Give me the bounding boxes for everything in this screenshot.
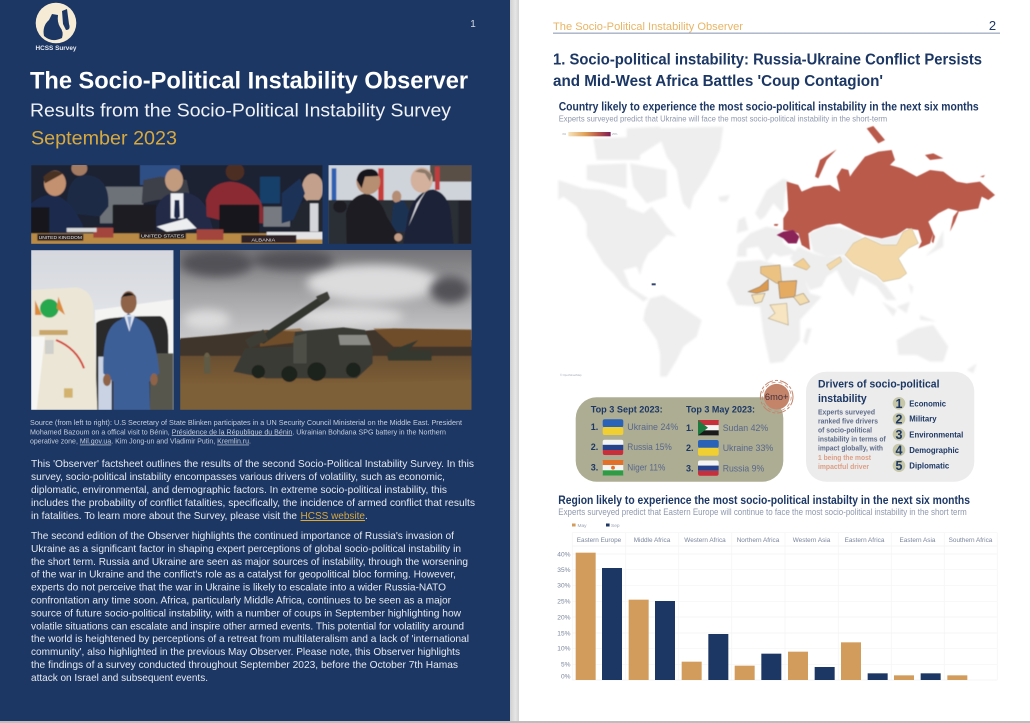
bar chart heading: Region likely to experience the most socio-political instabilty in the next six months [558,495,970,507]
text block: survey introduction: includes the probability of conflict fatalities, specifically, the incidence of armed conflict that results [31,498,475,509]
y axis labels: 25% [557,599,571,606]
May bars [576,553,967,680]
flag: Russia [698,460,719,476]
country: China [845,228,918,282]
flag: Niger [603,460,623,476]
country: Afghanistan [827,257,842,270]
country: Syria [793,258,810,270]
photo: UN Security Council: UNITED STATES [141,233,185,239]
running header [553,18,1000,34]
y axis labels: 40% [557,552,571,558]
panel: top 3 countries: 3. [591,462,598,472]
September bars [602,568,941,680]
flag: Ukraine [698,440,719,456]
text block: survey introduction [31,459,475,522]
text block: survey findings: volatile situations can escalate and inspire other armed events. This potential for volatility around [31,622,464,632]
text block: survey findings: the short term. Russia and Ukraine are seen as major sources of instability, through the worsening [31,557,468,568]
y axis labels: 0% [561,673,571,680]
driver 1: Economic: Economic [909,400,947,408]
subtitle: Results from the Socio-Political Instability Survey [30,100,452,120]
running header: The Socio-Political Instability Observer [553,21,743,33]
list: May results [723,423,774,474]
region labels: Eastern Africa [845,537,885,544]
drivers description [818,408,886,471]
logo: HCSS Survey [36,3,77,52]
page bottom edge [0,721,1030,723]
country: Nigeria [752,293,765,303]
region labels [577,537,993,544]
drivers heading: Drivers of socio-political [818,378,940,390]
chart legend [572,523,620,529]
driver 2: Military [893,412,937,426]
region labels: Western Asia [793,537,831,544]
badge: 6mo+: 6mo+ [765,392,788,402]
text block: survey findings: confrontation any time soon. Africa, particularly Middle Africa, continues to be seen as a major [31,596,452,606]
section heading: and Mid-West Africa Battles 'Coup Contagion' [553,73,883,90]
drivers description: Experts surveyed [818,408,875,416]
chart legend: May [578,523,587,529]
country: Ethiopia [793,293,809,305]
photo: Kim Jong-un and Vladimir Putin [328,165,472,244]
driver 5: Diplomatic: 5 [896,459,903,473]
map legend [562,132,618,136]
panel: top 3 countries: 1. [591,422,598,432]
date: September 2023 [31,128,177,150]
text block: survey findings: The second edition of the Observer highlights the continued importance of Russia's invasion of [31,531,454,542]
photo caption: Source (from left to right): U.S Secretary of State Blinken participates in a UN Security Council Ministerial on the Middle East. President [30,418,462,427]
list: May results: Russia 9% [723,464,765,474]
text block: survey introduction: survey, socio-political instability encompasses various drivers of volatility, such as economic, [31,472,445,483]
drivers heading: instability [818,393,868,405]
driver 5: Diplomatic [893,459,950,473]
bar chart subheading: Experts surveyed predict that Eastern Europe will continue to face the most socio-political instability in the short term [558,507,967,517]
region labels: Middle Africa [634,537,671,544]
text block: survey introduction: in fatalities. To learn more about the Survey, please visit the [31,511,297,522]
region labels: Northern Africa [737,537,780,544]
text block: survey introduction: diplomatic, environmental, and demographic factors. In extreme socio-political instability, this [31,485,447,496]
list: May results: Sudan 42% [723,423,769,434]
panel: top 3 countries: 1. [686,423,694,433]
badge: 6mo+ [760,380,793,413]
driver 4: Demographic: 4 [896,444,903,458]
driver 1: Economic [893,397,947,411]
page gutter [510,0,519,723]
logo: HCSS Survey: HCSS Survey [36,45,77,52]
country: Libya [761,265,782,283]
list: September results: Ukraine 24% [627,422,679,433]
title: The Socio-Political Instability Observer [30,68,468,94]
running header: 2 [989,18,996,33]
y axis labels: 35% [557,567,571,574]
list: September results: Niger 11% [627,462,666,474]
map legend: 0% [562,132,567,136]
region labels: Eastern Europe [577,537,622,544]
drivers description: instability in terms of [818,435,886,444]
drivers description: impact globally, with [818,444,883,453]
panel: top 3 countries: 3. [686,464,694,474]
drivers description: ranked five drivers [818,417,878,426]
y axis labels: 10% [557,646,571,653]
list: September results: Russia 15% [627,442,672,453]
heading: top 3 September: Top 3 Sept 2023: [591,404,663,414]
driver 2: Military: 2 [896,412,903,426]
photo: UN Security Council: UNITED KINGDOM [39,235,82,241]
country: DR Congo [768,303,788,325]
panel: drivers of socio-political instability [806,372,974,482]
drivers heading [818,378,940,405]
drivers description: 1 being the most [818,453,872,462]
y axis labels: 5% [561,662,571,669]
text block: survey findings: community', also highlighted in the previous May Observer. Please note, this Observer highlights [31,647,460,658]
photo caption [30,418,462,446]
heading: top 3 May: Top 3 May 2023: [686,404,755,414]
page number 1: 1 [470,19,476,30]
section heading: 1. Socio-political instability: Russia-Ukraine Conflict Persists [553,52,982,68]
driver 4: Demographic: Demographic [909,446,960,455]
driver 3: Environmental [893,428,963,442]
list: September results [627,422,679,474]
panel: top 3 countries: 2. [591,442,598,452]
panel: cover page background [0,0,510,721]
driver 1: Economic: 1 [896,397,903,411]
photo: UN Security Council: ALBANIA [251,237,276,243]
text block: survey introduction: This 'Observer' factsheet outlines the results of the second Socio-Political Instability Survey. In this [31,459,474,470]
flag: Ukraine [603,419,623,435]
y axis labels [557,552,571,680]
country: Russia [774,126,995,250]
country: Sudan [778,281,797,298]
country: Niger [748,279,768,293]
y axis labels: 30% [557,583,571,590]
country: Ukraine [777,230,799,243]
country: Haiti [652,283,656,285]
text block: survey findings: the findings of a survey conducted throughout September 2023, before the October 7th Hamas [31,660,458,671]
flag: Sudan [698,420,719,435]
panel: top 3 countries: 2. [686,443,694,453]
photo: President Bazoum on aircraft stairs [31,250,174,410]
driver 5: Diplomatic: Diplomatic [909,462,950,471]
text block: survey findings: of the war in Ukraine and the conflict's role as a catalyst for geopolitical bloc forming. However, [31,570,456,580]
photo: Bohdana SPG battery in a field [180,250,472,410]
list: May results: Ukraine 33% [723,443,774,454]
text block: survey introduction: . [365,511,368,522]
flag: Russia [603,440,623,455]
map base land [558,127,977,377]
driver 3: Environmental: 3 [896,428,903,442]
chart legend: Sep [611,523,620,529]
text block: survey findings [31,531,469,684]
driver 2: Military: Military [909,414,937,424]
photo: UN Security Council [31,161,323,244]
map credit: © OpenStreetMap [560,373,582,377]
text block: survey findings: Ukraine as a significant factor in shaping expert perceptions of global socio-political instability in [31,544,461,555]
text block: survey findings: the world is heightened by perceptions of a retreat from multilateralism and a lack of 'international [31,634,469,645]
text block: survey findings: source of future socio-political instability, with a number of coups in September highlighting how [31,608,462,620]
y axis labels: 15% [557,630,571,637]
text block: survey findings: experts do not perceive that the war in Ukraine is likely to escalate into a wider Russia-NATO [31,582,446,594]
map heading: Country likely to experience the most socio-political instability in the next six months [559,102,979,114]
region labels: Southern Africa [949,537,993,544]
drivers description: of socio-political [818,426,872,435]
bar chart: region ranking [557,533,997,680]
section heading [553,52,982,90]
y axis labels: 20% [557,614,571,621]
drivers description: impactful driver [818,462,869,471]
text block: survey findings: attack on Israel and subsequent events. [31,673,208,684]
region labels: Eastern Asia [900,537,936,544]
world map [558,126,995,377]
driver 4: Demographic [893,444,960,458]
photo caption: Mohamed Bazoum on a offical visit to Bénin, Présidence de la République du Bénin. Ukrainian Bohdana SPG battery in the Northern [30,427,446,436]
panel: top 3 countries [576,397,783,482]
driver 3: Environmental: Environmental [909,431,963,440]
map legend: 25% [612,132,618,136]
text block: survey introduction: HCSS website [300,511,365,522]
region labels: Western Africa [684,537,726,544]
map subheading: Experts surveyed predict that Ukraine will face the most socio-political instability in the short-term [559,114,887,124]
photo caption: operative zone, Mil.gov.ua. Kim Jong-un and Vladimir Putin, Kremlin.ru. [30,437,251,446]
